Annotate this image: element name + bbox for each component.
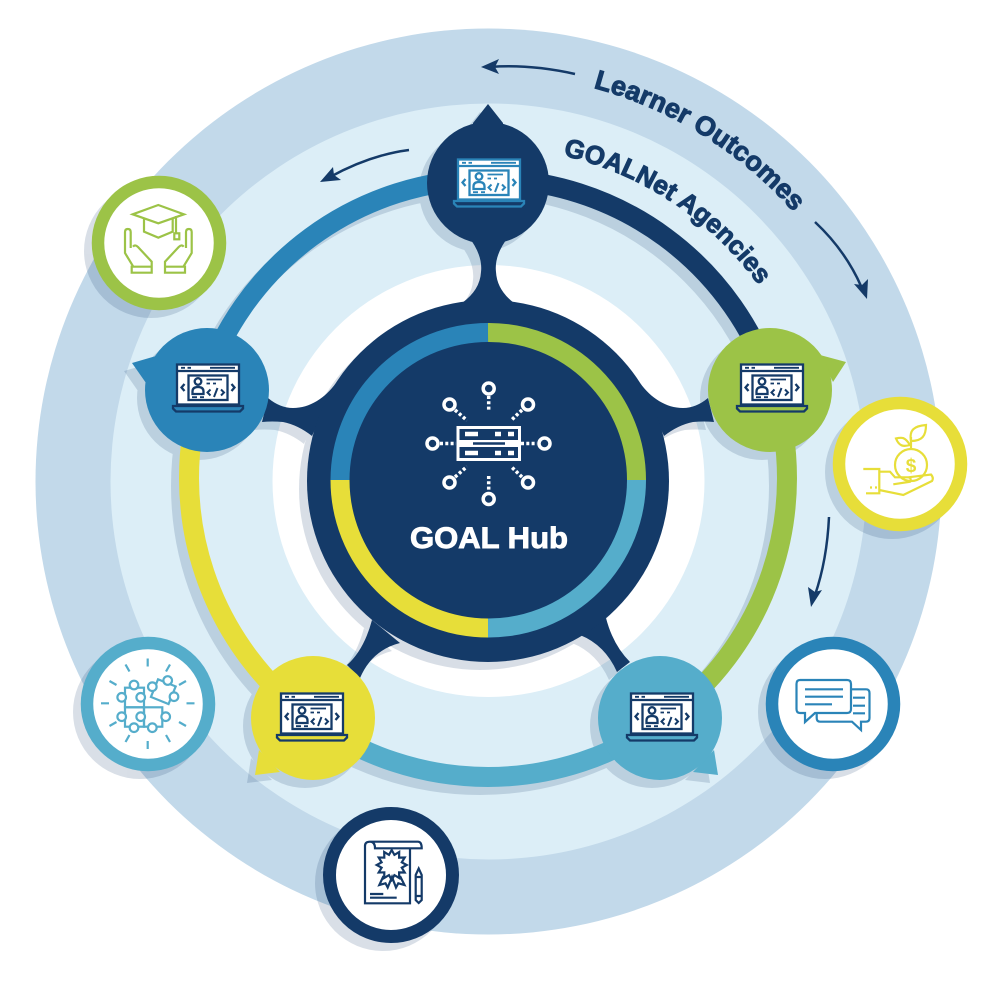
arrow: right, inner ring (808, 517, 829, 607)
label: Learner Outcomes: Learner Outcomes (594, 70, 802, 210)
arc: green (662, 389, 787, 721)
outcome: graduation cap and hands (98, 182, 220, 304)
node: green agency (708, 328, 846, 452)
node: teal agency (598, 656, 722, 780)
arrow: top left, inner ring (320, 150, 409, 182)
white inner disc (272, 265, 704, 697)
arc: navy (488, 179, 773, 389)
central hub (307, 300, 669, 662)
hub label: GOAL Hub (410, 522, 568, 555)
outcome: chat bubbles (772, 643, 894, 765)
arc: blue (203, 179, 488, 389)
outcome: hand with coin and sprout: $ (906, 456, 917, 477)
node: yellow agency (251, 656, 375, 780)
network ring arcs (189, 179, 787, 777)
icon: server with network nodes (427, 383, 550, 504)
arrow: top, outer ring (481, 59, 575, 74)
outcome: puzzle pieces (87, 643, 209, 765)
arrow: upper right, outer ring (815, 222, 868, 299)
background ring: GOALNet Agencies (110, 104, 866, 860)
drop shadows (73, 112, 959, 951)
outcome: certificate and pencil (330, 814, 452, 936)
node: blue agency (132, 328, 269, 452)
label: GOALNet Agencies: GOALNet Agencies (565, 140, 768, 284)
hub ring segments (340, 332, 636, 628)
node: top agency (427, 104, 549, 244)
arc: yellow (189, 389, 314, 721)
hub connectors (262, 236, 714, 678)
outcome: hand with coin and sprout (839, 403, 961, 525)
arc: teal (314, 721, 662, 777)
